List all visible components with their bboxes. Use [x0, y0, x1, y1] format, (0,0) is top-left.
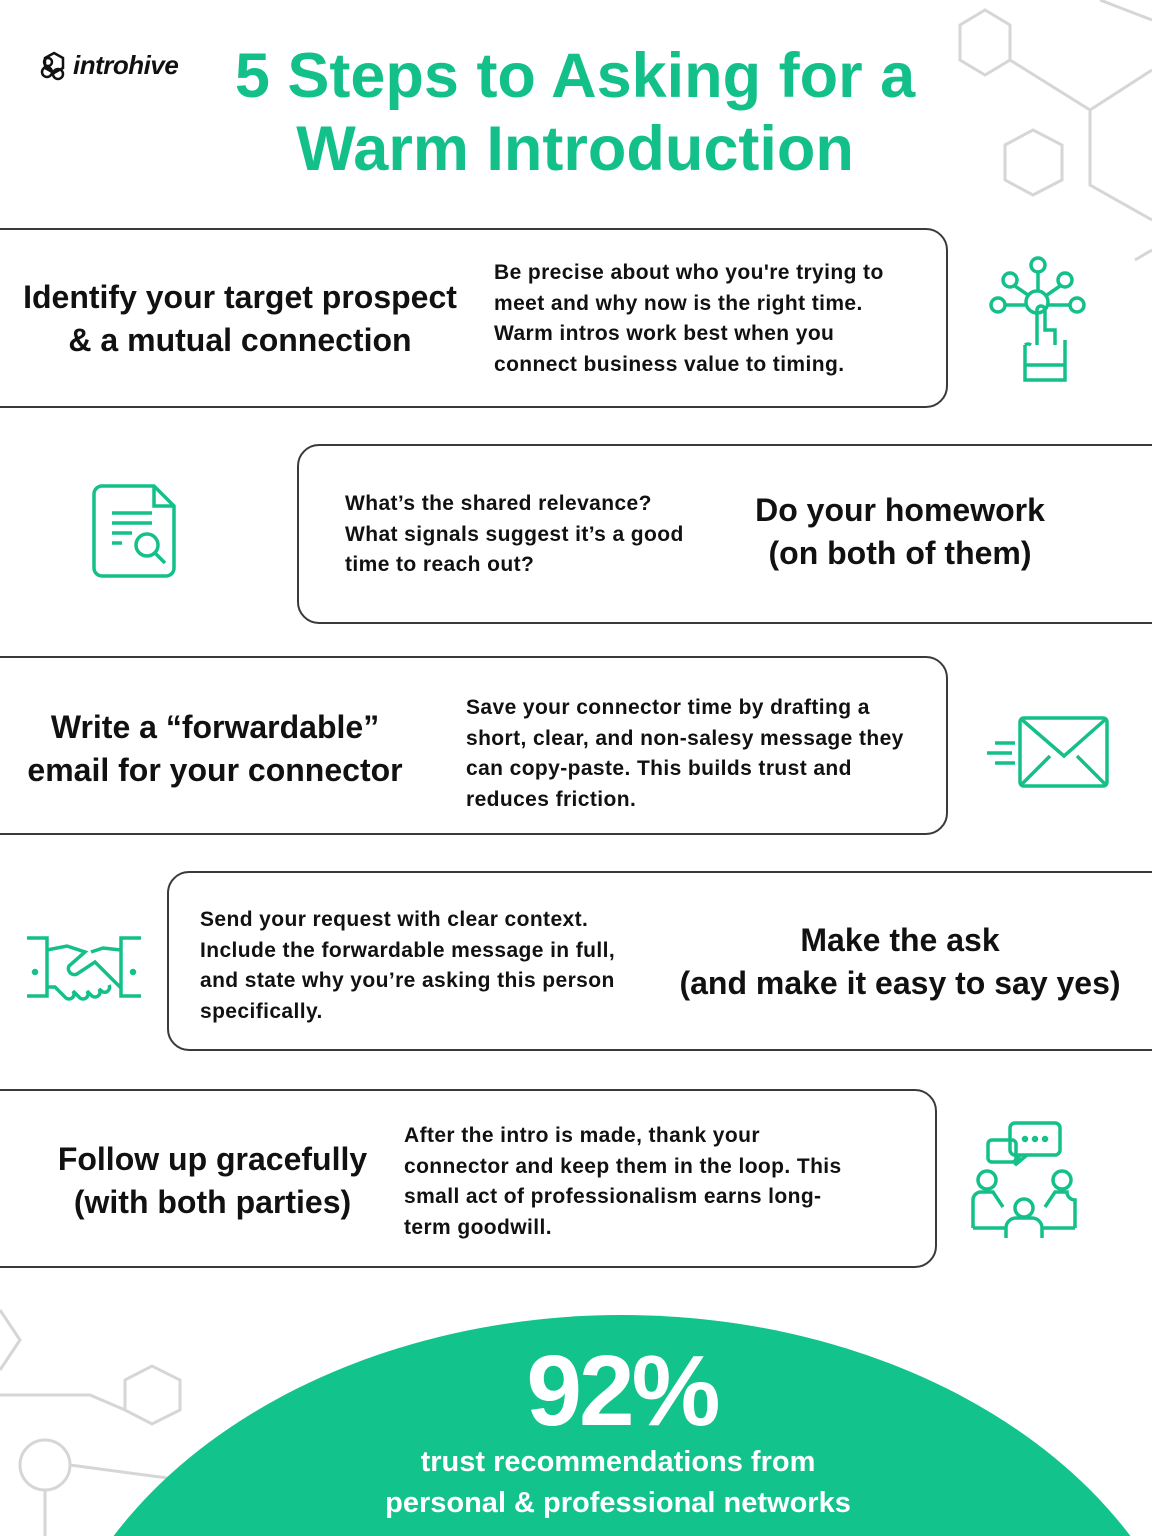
text: Identify your target prospect [23, 279, 457, 315]
text: (and make it easy to say yes) [679, 965, 1121, 1001]
text: (with both parties) [74, 1184, 351, 1220]
text: connector and keep them in the loop. This [404, 1154, 842, 1178]
text: Warm intros work best when you [494, 322, 834, 345]
icon: hand network [989, 256, 1086, 382]
text: Be precise about who you're trying to [494, 261, 884, 284]
icon: document search [92, 484, 176, 578]
logo: introhive [73, 50, 178, 80]
text: can copy-paste. This builds trust and [466, 757, 852, 780]
text: short, clear, and non-salesy message they [466, 726, 904, 750]
icon: meeting people [971, 1121, 1077, 1238]
green stat semicircle [114, 1315, 1130, 1536]
text: (on both of them) [768, 535, 1032, 571]
text: small act of professionalism earns long- [404, 1185, 821, 1208]
step 2 [297, 444, 1152, 624]
title [235, 41, 916, 184]
text: & a mutual connection [68, 322, 412, 358]
stat caption [385, 1446, 851, 1519]
text: Write a “forwardable” [51, 709, 379, 745]
text: Follow up gracefully [58, 1141, 367, 1177]
text: After the intro is made, thank your [404, 1124, 760, 1147]
text: Include the forwardable message in full, [200, 938, 615, 962]
step 4 [167, 871, 1152, 1051]
text: email for your connector [27, 752, 403, 788]
text: time to reach out? [345, 553, 534, 576]
stat: 92%: 92% [526, 1335, 718, 1447]
step 3 [0, 656, 948, 835]
icon: envelope [987, 716, 1109, 788]
text: What signals suggest it’s a good [345, 522, 684, 546]
text: Do your homework [755, 492, 1045, 528]
text: Send your request with clear context. [200, 908, 588, 931]
text: reduces friction. [466, 788, 636, 810]
step 5 [0, 1089, 937, 1268]
text: Save your connector time by drafting a [466, 696, 870, 719]
stat caption: personal & professional networks [385, 1487, 851, 1519]
icon: handshake [27, 936, 141, 1001]
text: and state why you’re asking this person [200, 969, 615, 992]
text: specifically. [200, 1000, 323, 1022]
text: term goodwill. [404, 1216, 552, 1238]
title: Warm Introduction [296, 114, 854, 184]
text: meet and why now is the right time. [494, 292, 863, 314]
stat caption: trust recommendations from [421, 1446, 815, 1478]
text: Make the ask [800, 922, 1000, 958]
step 1 [0, 228, 948, 408]
text: connect business value to timing. [494, 352, 844, 376]
title: 5 Steps to Asking for a [235, 41, 915, 111]
text: What’s the shared relevance? [345, 492, 652, 515]
